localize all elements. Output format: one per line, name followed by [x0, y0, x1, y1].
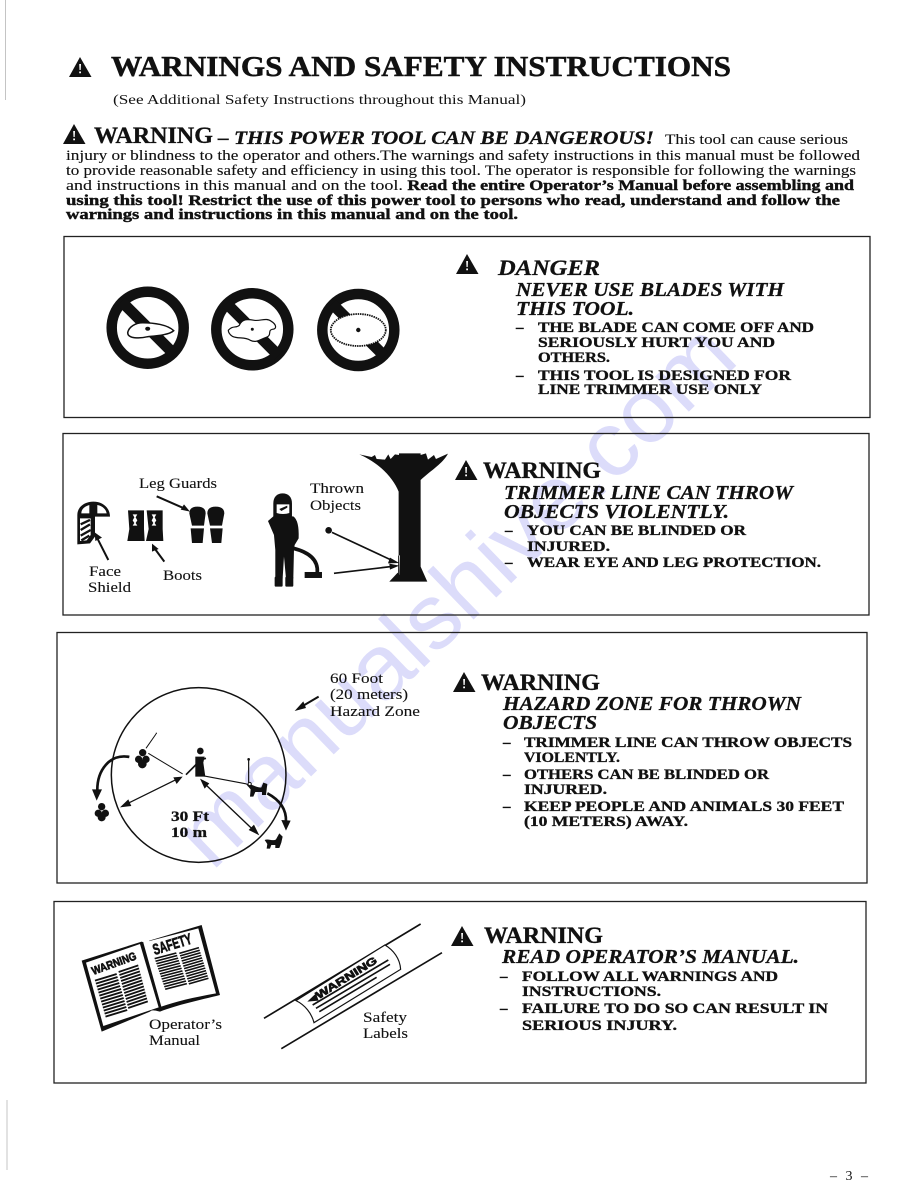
icon: open book: SAFETY: [151, 931, 194, 959]
arrow: radius right: [200, 779, 259, 835]
label: radius: [171, 809, 209, 841]
intro heading: WARNING: [94, 123, 213, 148]
warning subheading: HAZARD ZONE FOR THROWN: [502, 693, 803, 715]
danger heading: DANGER: [497, 255, 600, 280]
warning list: [499, 969, 828, 1034]
label: hazard zone: 60 Foot: [330, 671, 383, 687]
arrow: dog moves away: [267, 793, 291, 831]
warning list: WEAR EYE AND LEG PROTECTION.: [527, 555, 821, 571]
icon: intro warning triangle: [63, 124, 86, 144]
intro text: [66, 132, 861, 223]
warning list: [502, 735, 852, 830]
warning subheading: TRIMMER LINE CAN THROW: [504, 482, 794, 504]
warning list: YOU CAN BE BLINDED OR: [527, 523, 746, 539]
panel: danger blades: [64, 236, 870, 418]
intro text: using this tool! Restrict the use of this power tool to persons who read, understand and follow the: [66, 193, 841, 209]
warning list: [504, 523, 821, 571]
intro text: warnings and instructions in this manual and on the tool.: [66, 207, 518, 223]
icon: central operator: [186, 748, 206, 777]
warning list: KEEP PEOPLE AND ANIMALS 30 FEET: [524, 799, 844, 815]
danger list: THIS TOOL IS DESIGNED FOR: [538, 368, 791, 384]
warning subheading: OBJECTS VIOLENTLY.: [504, 501, 729, 523]
danger list: SERIOUSLY HURT YOU AND: [538, 335, 775, 351]
warning list: INSTRUCTIONS.: [522, 984, 661, 1000]
icon: title warning triangle: [69, 57, 92, 77]
icon: tree: [359, 453, 448, 582]
warning list: –: [502, 799, 511, 815]
icon: warning triangle: [455, 460, 478, 480]
label: safety labels: Labels: [363, 1026, 408, 1042]
warning list: OTHERS CAN BE BLINDED OR: [524, 767, 769, 783]
warning heading: WARNING: [481, 670, 600, 695]
icon: boots: [127, 510, 163, 541]
illustration: protective gear: [77, 453, 448, 587]
panel: thrown objects: [63, 434, 869, 615]
label: radius: 30 Ft: [171, 809, 209, 825]
intro text: This tool can cause serious: [665, 132, 848, 148]
icon: warning triangle: [453, 672, 476, 692]
label: boots: Boots: [163, 568, 202, 584]
warning subheading: OBJECTS: [503, 712, 597, 734]
title text: WARNINGS AND SAFETY INSTRUCTIONS: [111, 51, 731, 83]
panel: read manual: [54, 902, 866, 1083]
title: [69, 51, 731, 83]
label: hazard zone: (20 meters): [330, 687, 408, 703]
warning subheading: [502, 693, 803, 734]
label: face shield: [88, 564, 132, 596]
intro warning block: [63, 123, 861, 223]
icon: no blade 2: [216, 293, 288, 365]
arrow: radius left: [120, 777, 183, 807]
danger subheading: [515, 279, 786, 320]
warning list: SERIOUS INJURY.: [522, 1018, 677, 1034]
warning subheading: READ OPERATOR’S MANUAL.: [501, 946, 799, 968]
label: thrown objects: Thrown: [310, 481, 365, 497]
icon: safety label on shaft: [264, 924, 442, 1049]
icon: dog bystander: [204, 758, 267, 797]
intro subheading: – THIS POWER TOOL CAN BE DANGEROUS!: [217, 128, 654, 149]
danger list: [515, 320, 814, 398]
icon: thrown object with path: [325, 527, 399, 573]
hazard circle: [111, 688, 286, 862]
warning list: TRIMMER LINE CAN THROW OBJECTS: [524, 735, 852, 751]
arrow: person moves away: [92, 756, 129, 801]
label: hazard zone: [330, 671, 420, 720]
intro text: injury or blindness to the operator and others.The warnings and safety instructions in this manual must be followed: [66, 148, 861, 164]
icon: person outside: [95, 803, 109, 821]
warning list: FOLLOW ALL WARNINGS AND: [522, 969, 778, 985]
icon: no blade 1: [112, 292, 184, 364]
danger subheading: THIS TOOL.: [516, 298, 634, 320]
label: thrown objects: [310, 481, 365, 514]
arrow: hazard zone pointer: [295, 697, 319, 711]
label: safety labels: [363, 1010, 408, 1042]
warning subheading: [504, 482, 794, 523]
icon: operator with trimmer: [268, 493, 322, 587]
panel: hazard zone: [57, 632, 867, 883]
label: operator's manual: [149, 1017, 222, 1049]
icon: leg guards: [189, 507, 224, 543]
label: operator's manual: Operator’s: [149, 1017, 222, 1033]
warning list: (10 METERS) AWAY.: [524, 814, 688, 830]
icon: open book: WARNING: [90, 951, 138, 978]
danger list: OTHERS.: [538, 350, 610, 366]
danger list: LINE TRIMMER USE ONLY: [538, 382, 762, 398]
label: radius: 10 m: [171, 825, 207, 841]
subtitle: (See Additional Safety Instructions throughout this Manual): [113, 93, 526, 108]
page number: – 3 –: [829, 1169, 869, 1184]
icon: no blade 3: [322, 294, 394, 366]
icon: safety label on shaft: WARNING: [314, 955, 380, 1002]
warning list: –: [499, 969, 508, 985]
warning list: INJURED.: [527, 539, 610, 555]
label: safety labels: Safety: [363, 1010, 408, 1026]
label: face shield: Face: [89, 564, 121, 580]
warning list: –: [502, 767, 511, 783]
warning list: VIOLENTLY.: [524, 750, 620, 766]
warning list: –: [504, 523, 513, 539]
label: leg guards: Leg Guards: [139, 476, 217, 492]
danger list: –: [515, 368, 524, 384]
watermark: manualshive.com: [155, 302, 755, 886]
intro text: and instructions in this manual and on the tool. Read the entire Operator’s Manual before assembling and: [66, 178, 854, 194]
icon: danger triangle: [456, 254, 478, 274]
warning list: –: [499, 1001, 508, 1017]
warning list: –: [502, 735, 511, 751]
label: thrown objects: Objects: [310, 498, 361, 514]
danger subheading: NEVER USE BLADES WITH: [515, 279, 786, 301]
label: hazard zone: Hazard Zone: [330, 704, 420, 720]
arrows to gear: [95, 496, 190, 562]
intro text: to provide reasonable safety and efficiency in using this tool. The operator is responsible for following the warnings: [66, 163, 856, 179]
label: operator's manual: Manual: [149, 1033, 200, 1049]
illustration: manual and labels: [82, 924, 442, 1049]
icon: face shield: [77, 502, 110, 544]
label: face shield: Shield: [88, 580, 132, 596]
warning list: INJURED.: [524, 782, 607, 798]
icon: dog outside: [265, 833, 283, 849]
warning list: FAILURE TO DO SO CAN RESULT IN: [522, 1001, 828, 1017]
icon: open book: [82, 925, 220, 1032]
warning list: –: [504, 555, 513, 571]
danger list: –: [515, 320, 524, 336]
warning heading: WARNING: [484, 923, 603, 948]
icon: warning triangle: [451, 926, 474, 946]
icon: person bystander: [135, 733, 183, 774]
warning heading: WARNING: [483, 458, 601, 483]
danger list: THE BLADE CAN COME OFF AND: [538, 320, 814, 336]
chart: hazard zone diagram: [92, 688, 319, 862]
